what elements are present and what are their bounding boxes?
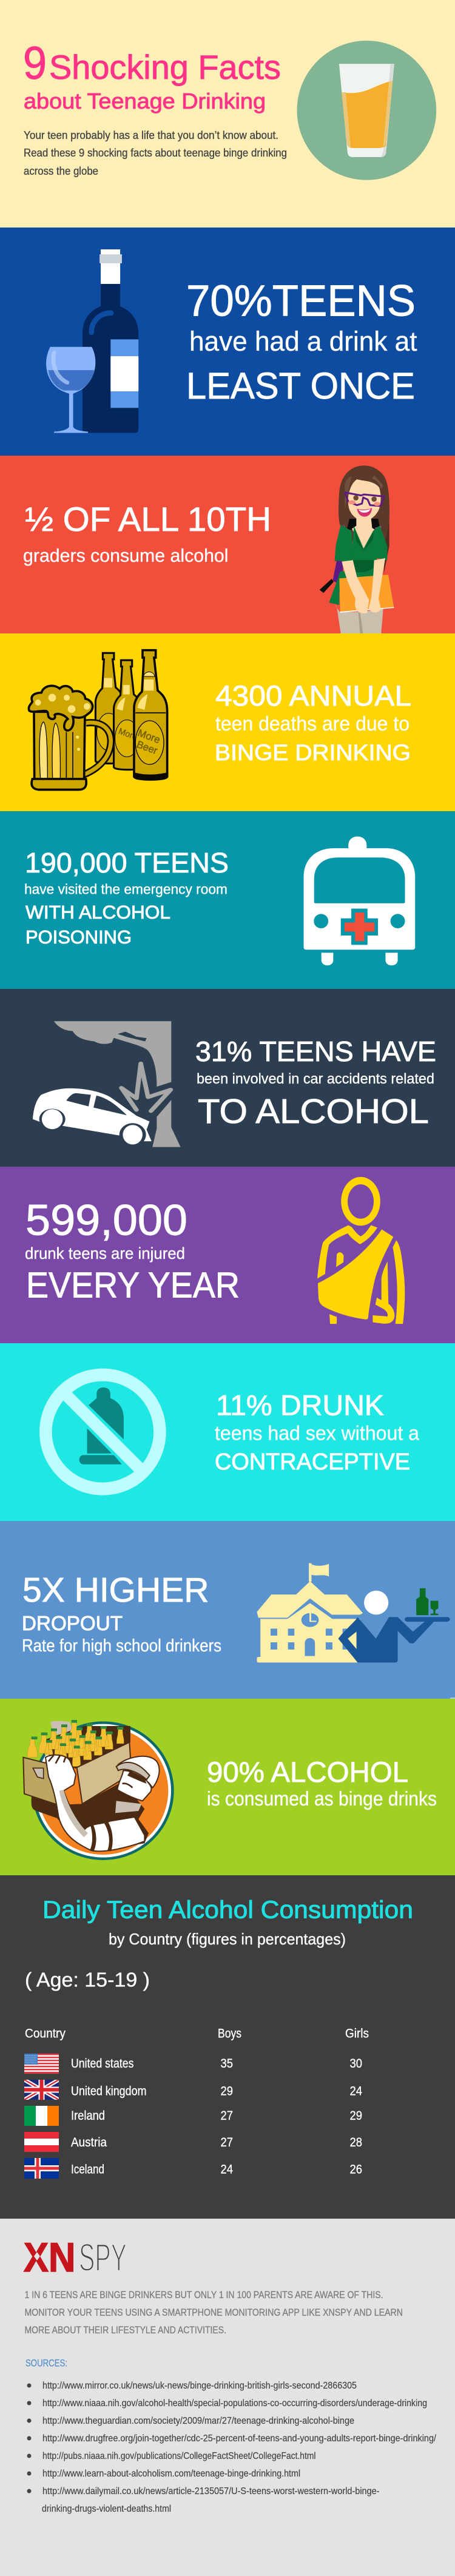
panel: 4300 annual deaths [0, 633, 455, 811]
row: Austria: 27 [221, 2136, 233, 2149]
title: Shocking Facts [49, 48, 281, 86]
panel: header [0, 0, 455, 228]
row: Ireland: Ireland [71, 2109, 105, 2123]
row: Austria [24, 2132, 362, 2152]
icon: wine bottle and glass [46, 249, 138, 433]
title: 9 [23, 38, 47, 89]
stat text: 4300 ANNUAL [215, 679, 411, 712]
icon: school and waiter with drinks [257, 1563, 450, 1662]
table heading [25, 1895, 413, 1991]
stat text: teen deaths are due to [215, 712, 410, 735]
row: Iceland: 24 [221, 2162, 233, 2177]
stat text: have visited the emergency room [24, 881, 228, 897]
stat text: Rate for high school drinkers [22, 1636, 221, 1656]
stat text [215, 679, 411, 765]
icon: man carrying crate of beer [23, 1720, 174, 1860]
stat text [215, 1389, 420, 1475]
panel: 31% car accidents [0, 989, 455, 1167]
panel: 5x higher dropout [0, 1521, 455, 1699]
intro text: Your teen probably has a life that you don’t know about. [24, 129, 278, 141]
stat text: graders consume alcohol [23, 545, 228, 566]
stat text [22, 1571, 221, 1656]
logo: XNSPY: SPY [79, 2236, 127, 2279]
row: Ireland: 29 [349, 2109, 362, 2123]
stat text: CONTRACEPTIVE [215, 1449, 410, 1475]
row: United states: 30 [349, 2057, 362, 2071]
stat text: ½ OF ALL 10TH [25, 500, 271, 538]
flag: UK [24, 2080, 59, 2100]
row: United states: United states [71, 2057, 133, 2071]
stat text [186, 277, 417, 406]
front bottle: More [136, 727, 162, 746]
table heading: Daily Teen Alcohol Consumption [42, 1895, 413, 1923]
stat text: WITH ALCOHOL [25, 902, 170, 923]
logo: XNSPY [24, 2234, 127, 2281]
back bottle [95, 653, 124, 763]
icon: car crashing into tree [33, 1021, 181, 1147]
sources list: http://www.theguardian.com/society/2009/mar/27/teenage-drinking-alcohol-binge [42, 2416, 354, 2426]
row: United states [24, 2054, 362, 2074]
table heading: ( Age: 15-19 ) [25, 1968, 150, 1991]
flag: Ireland [24, 2106, 59, 2126]
stat text: is consumed as binge drinks [207, 1787, 437, 1810]
stat text [195, 1036, 436, 1131]
panel: half of 10th graders [0, 456, 455, 633]
row: Iceland: 26 [349, 2162, 362, 2177]
call to action text: 1 IN 6 TEENS ARE BINGE DRINKERS BUT ONLY 1 IN 100 PARENTS ARE AWARE OF THIS. [24, 2289, 383, 2301]
panel: daily teen alcohol consumption table [0, 1875, 455, 2219]
table heading: by Country (figures in percentages) [109, 1930, 346, 1948]
beer mug [29, 686, 111, 790]
stat text: 599,000 [25, 1196, 187, 1245]
stat text [23, 500, 271, 566]
table header row [25, 2026, 369, 2041]
panel: 599,000 injured [0, 1167, 455, 1343]
stat text: 90% ALCOHOL [207, 1756, 408, 1788]
row: United kingdom: 24 [349, 2085, 362, 2098]
panel: 90% alcohol [0, 1699, 455, 1875]
stat text: BINGE DRINKING [215, 740, 411, 765]
row: United kingdom: 29 [221, 2085, 233, 2098]
flag: USA [24, 2054, 59, 2074]
panel: 70% teens [0, 228, 455, 456]
row: Austria: Austria [71, 2136, 107, 2149]
stat text: DROPOUT [22, 1612, 123, 1634]
flag: Iceland [24, 2158, 59, 2179]
row: Austria: 28 [349, 2136, 362, 2149]
sources list [27, 2381, 437, 2514]
title [23, 38, 281, 113]
table header row: Boys [218, 2026, 241, 2041]
icon: ambulance [304, 837, 415, 965]
front bottle [134, 650, 167, 780]
icon: no condom symbol [39, 1369, 166, 1495]
intro text: across the globe [24, 165, 98, 177]
stat text: 11% DRUNK [216, 1389, 384, 1421]
stat text: 190,000 TEENS [25, 847, 229, 878]
stat text: 70%TEENS [186, 277, 416, 325]
front bottle: Beer [135, 738, 160, 757]
logo: XNSPY: XN [24, 2234, 75, 2281]
panel: 190,000 teens [0, 811, 455, 989]
icon: beer mug and bottles [29, 650, 167, 790]
stat text: been involved in car accidents related [197, 1071, 434, 1087]
stat text [24, 847, 229, 948]
stat text: 5X HIGHER [22, 1571, 209, 1610]
intro text [24, 129, 287, 177]
row: Ireland [24, 2106, 362, 2126]
call to action text: MORE ABOUT THEIR LIFESTYLE AND ACTIVITIES. [24, 2324, 226, 2336]
row: United states: 35 [221, 2057, 233, 2071]
stat text: EVERY YEAR [26, 1266, 240, 1306]
stat text: teens had sex without a [215, 1422, 420, 1444]
table header row: Country [25, 2026, 66, 2041]
sources list: http://www.learn-about-alcoholism.com/teenage-binge-drinking.html [42, 2469, 300, 2479]
sources heading: SOURCES: [25, 2358, 67, 2369]
flag: Austria [24, 2132, 59, 2152]
stat text: LEAST ONCE [186, 365, 415, 406]
stat text: TO ALCOHOL [198, 1092, 429, 1131]
sources list: http://www.mirror.co.uk/news/uk-news/binge-drinking-british-girls-second-2866305 [42, 2381, 357, 2391]
panel: footer [0, 2219, 455, 2576]
call to action text [24, 2289, 403, 2336]
row: Ireland: 27 [221, 2109, 233, 2123]
stat text: POISONING [25, 926, 132, 948]
sources list: http://pubs.niaaa.nih.gov/publications/CollegeFactSheet/CollegeFact.html [42, 2451, 315, 2461]
row: United kingdom [24, 2080, 362, 2100]
icon: person with arm sling [317, 1177, 405, 1324]
row: United kingdom: United kingdom [71, 2085, 147, 2098]
intro text: Read these 9 shocking facts about teenage binge drinking [24, 147, 287, 159]
icon: glass of beer [297, 41, 436, 180]
middle bottle [114, 660, 142, 770]
sources list: drinking-drugs-violent-deaths.html [42, 2504, 171, 2514]
stat text: drunk teens are injured [25, 1244, 185, 1263]
row: Iceland: Iceland [71, 2162, 104, 2177]
stat text: have had a drink at [189, 326, 417, 357]
middle bottle: More [117, 726, 139, 742]
row: Iceland [24, 2158, 362, 2179]
sources list: http://www.dailymail.co.uk/news/article-2135057/U-S-teens-worst-western-world-binge- [42, 2486, 380, 2497]
stat text [207, 1756, 437, 1810]
stat text [25, 1196, 240, 1306]
icon: teen girl with glasses [320, 465, 394, 633]
table header row: Girls [345, 2026, 369, 2041]
title: about Teenage Drinking [24, 89, 266, 113]
panel: 11% drunk [0, 1343, 455, 1521]
stat text: 31% TEENS HAVE [195, 1036, 436, 1067]
